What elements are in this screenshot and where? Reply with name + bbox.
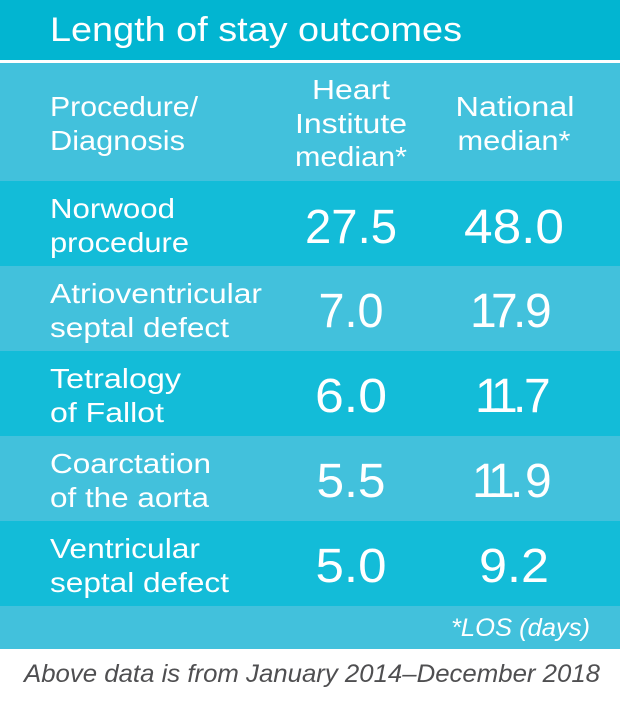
row: Coarctation of the aorta: of the aorta xyxy=(50,482,209,513)
row: Coarctation of the aorta xyxy=(0,436,620,521)
row: Norwood procedure: 27.5 xyxy=(305,201,397,254)
row: Ventricular septal defect: Ventricular xyxy=(50,533,200,564)
row: Tetralogy of Fallot: Tetralogy xyxy=(50,363,181,394)
row: Norwood procedure: Norwood xyxy=(50,193,175,224)
table header row xyxy=(0,63,620,181)
title banner xyxy=(0,0,620,60)
row: Atrioventricular septal defect xyxy=(0,266,620,351)
column heading: National median: median* xyxy=(458,125,571,156)
row: Coarctation of the aorta: 11.9 xyxy=(472,455,552,508)
row: Ventricular septal defect: 5.0 xyxy=(316,540,386,593)
footnote band: LOS (days): *LOS (days) xyxy=(451,614,590,642)
row: Ventricular septal defect: 9.2 xyxy=(479,540,549,593)
row: Coarctation of the aorta: 5.5 xyxy=(316,455,386,508)
row: Norwood procedure: 48.0 xyxy=(464,201,564,254)
row: Ventricular septal defect xyxy=(0,521,620,606)
row: Atrioventricular septal defect: 17.9 xyxy=(470,285,552,338)
row: Atrioventricular septal defect: Atrioventricular xyxy=(50,278,262,309)
column heading: National median xyxy=(456,91,574,156)
row: Coarctation of the aorta: Coarctation xyxy=(50,448,211,479)
row: Ventricular septal defect: septal defect xyxy=(50,567,229,598)
row: Tetralogy of Fallot xyxy=(0,351,620,436)
column heading: Heart Institute median: Heart xyxy=(312,74,390,105)
column heading: procedure: Procedure/ xyxy=(50,91,198,122)
source note: Above data is from January 2014–December 2018 xyxy=(22,660,600,688)
column heading: National median: National xyxy=(456,91,574,122)
row: Tetralogy of Fallot: 11.7 xyxy=(475,370,551,423)
footnote band: LOS (days) xyxy=(0,606,620,649)
row: Atrioventricular septal defect: septal defect xyxy=(50,312,229,343)
row: Tetralogy of Fallot: 6.0 xyxy=(315,370,387,423)
row: Tetralogy of Fallot: of Fallot xyxy=(50,397,164,428)
column heading: procedure: Diagnosis xyxy=(50,125,185,156)
row: Norwood procedure xyxy=(0,181,620,266)
column heading: Heart Institute median: Institute xyxy=(295,108,407,139)
row: Norwood procedure: procedure xyxy=(50,227,189,258)
row: Atrioventricular septal defect: 7.0 xyxy=(318,285,384,338)
title: Length of stay outcomes xyxy=(50,11,462,49)
column heading: procedure xyxy=(50,91,198,156)
column heading: Heart Institute median: median* xyxy=(295,141,407,172)
column heading: Heart Institute median xyxy=(295,74,407,172)
